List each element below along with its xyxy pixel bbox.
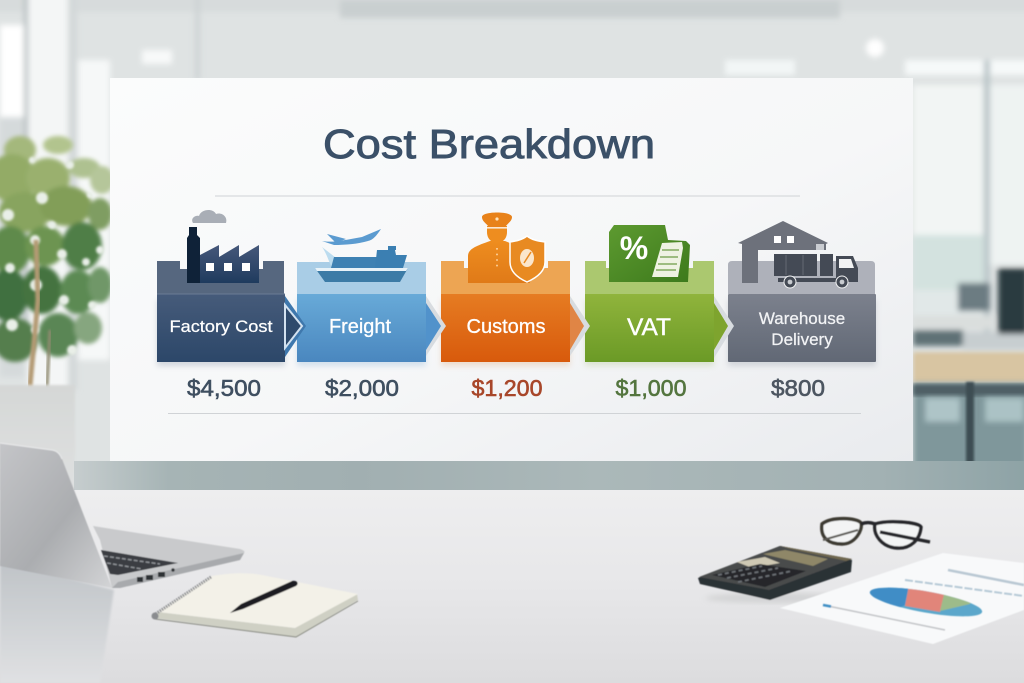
- notebook and pen: [152, 573, 358, 637]
- arrow: customs to VAT: [570, 296, 590, 356]
- bottom divider: [168, 413, 861, 414]
- display panel: [110, 78, 913, 461]
- value: VAT: $1,000: [616, 375, 686, 401]
- laptop: [0, 443, 244, 588]
- arrow: freight to customs: [426, 296, 446, 356]
- label: VAT: VAT: [627, 314, 671, 341]
- icon: ship and plane: [315, 229, 408, 282]
- card: factory cost: [157, 210, 285, 401]
- card: customs: [441, 212, 570, 401]
- label: warehouse delivery: Delivery: [771, 330, 833, 349]
- title: Cost Breakdown: [323, 121, 655, 167]
- label: customs: Customs: [466, 316, 546, 338]
- top divider: [215, 196, 800, 197]
- value: freight: $2,000: [325, 375, 399, 401]
- icon: tax document: [609, 225, 690, 282]
- value: customs: $1,200: [472, 375, 542, 401]
- eyeglasses: [822, 519, 930, 548]
- value: factory cost: $4,500: [187, 375, 261, 401]
- label: warehouse delivery: Warehouse: [759, 309, 845, 328]
- label: freight: Freight: [329, 316, 391, 338]
- icon: factory: [187, 210, 259, 283]
- value: warehouse delivery: $800: [771, 375, 825, 401]
- blurred office background: [0, 0, 1024, 500]
- card: warehouse delivery: [728, 221, 876, 401]
- icon: customs officer and shield: [468, 212, 545, 283]
- potted plant: [0, 136, 114, 495]
- desk surface: [0, 490, 1024, 683]
- percent sign: %: [620, 230, 648, 266]
- report page with chart: [780, 553, 1024, 644]
- arrow: factory to freight: [285, 296, 306, 357]
- label: factory cost: Factory Cost: [170, 317, 273, 336]
- oval chart: [869, 586, 983, 618]
- calculator: [698, 546, 852, 603]
- arrow: VAT to delivery: [714, 296, 734, 358]
- card: VAT: [585, 225, 714, 401]
- icon: warehouse and truck: [738, 221, 858, 288]
- card: freight: [297, 229, 426, 401]
- floor strip below panel: [74, 461, 1024, 491]
